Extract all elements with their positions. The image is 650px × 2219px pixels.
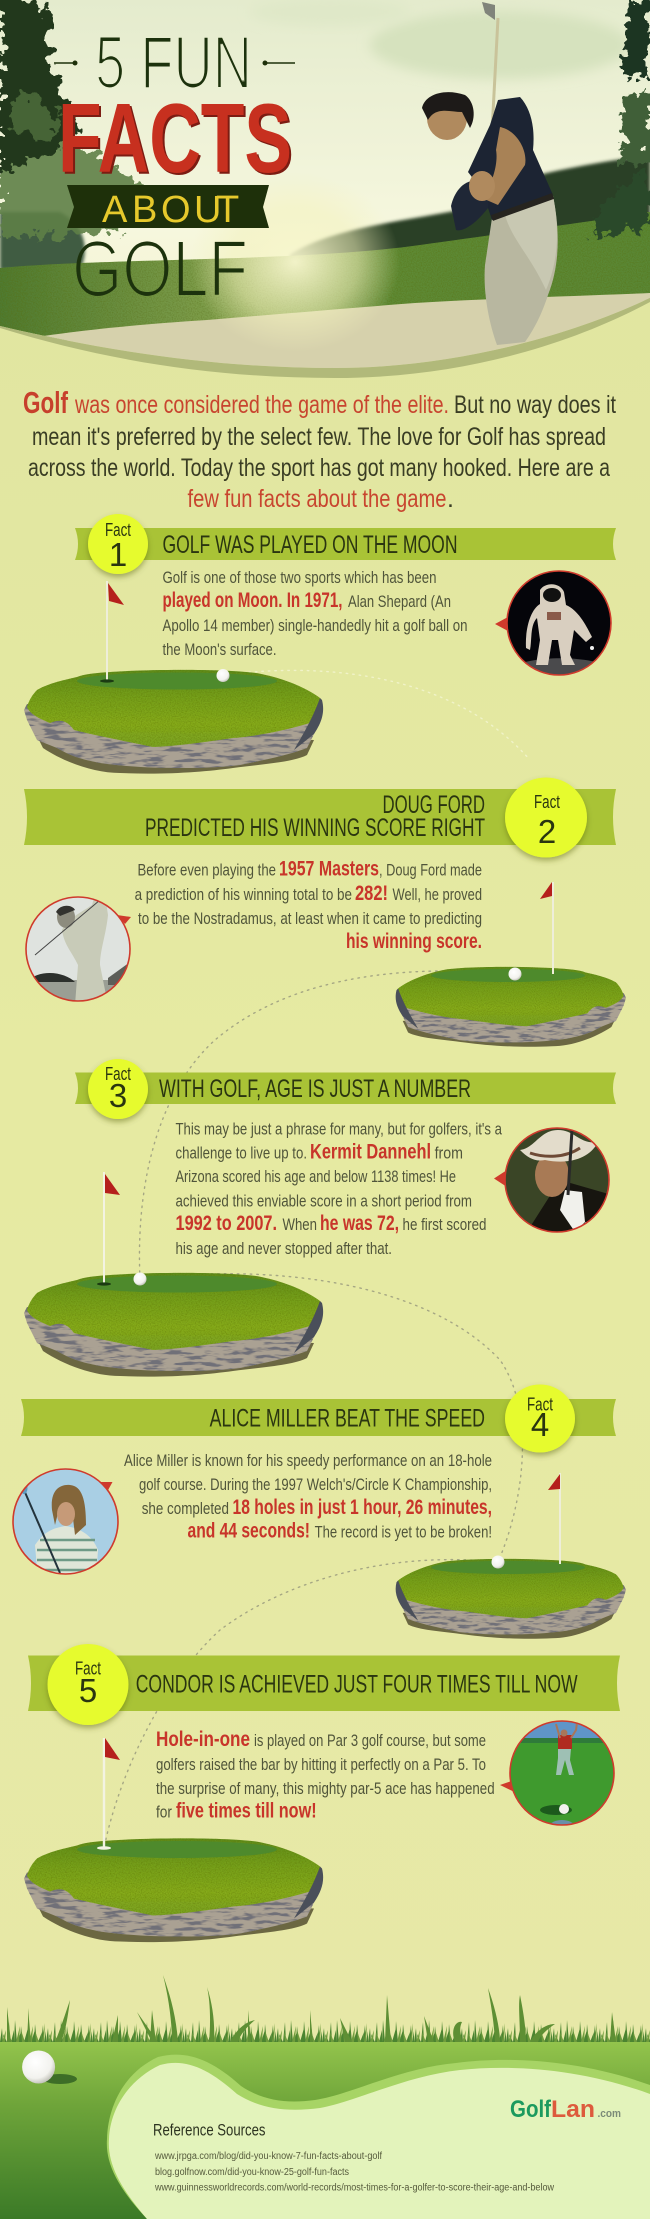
fact 3 body text: Arizona scored his age and below 1138 times! He	[176, 1168, 456, 1186]
fact 3 island	[24, 1273, 323, 1377]
fact 4 badge: Fact	[527, 1394, 553, 1414]
title	[54, 21, 295, 313]
fact 4 body text: 18 holes in just 1 hour, 26 minutes,	[232, 1496, 492, 1519]
footer sources panel	[107, 2055, 650, 2219]
fact 2 badge	[505, 778, 587, 858]
fact 1 panel	[24, 514, 620, 774]
fact 1 body text	[162, 569, 468, 659]
fact 5 flag	[97, 1738, 120, 1850]
reference sources heading: Reference Sources	[153, 2121, 266, 2140]
fact 2 badge: Fact	[534, 792, 560, 812]
fact 4 body text: The record is yet to be broken!	[315, 1524, 492, 1542]
fact 2 body text: his winning score.	[346, 930, 482, 953]
fact 1 astronaut photo	[495, 570, 612, 676]
fact 3 badge: Fact	[105, 1064, 131, 1084]
fact 4 Alice Miller photo	[12, 1468, 119, 1575]
fact 2 island	[396, 967, 626, 1047]
hero curved band	[0, 298, 650, 378]
fact 3 ribbon	[75, 1072, 616, 1104]
reference links: www.jrpga.com/blog/did-you-know-7-fun-facts-about-golf	[154, 2151, 382, 2162]
fact 2 heading: DOUG FORD	[382, 791, 485, 819]
fact 2 heading: PREDICTED HIS WINNING SCORE RIGHT	[145, 814, 485, 842]
fact 4 badge: 4	[531, 1406, 549, 1443]
title line: FACTS: FACTS	[60, 85, 294, 195]
reference links: www.guinnessworldrecords.com/world-records/most-times-for-a-golfer-to-score-their-age-and-below	[154, 2183, 555, 2194]
fact 5 body text: golfers raised the bar by hitting it perfectly on a Par 5. To	[156, 1756, 486, 1774]
intro paragraph	[23, 385, 616, 513]
fact 2 body text: to be the Nostradamus, at least when it came to predicting	[138, 910, 482, 928]
fact 5 island	[24, 1838, 323, 1942]
title line: 5 FUN: 5 FUN	[95, 21, 252, 104]
fact 5 body text: five times till now!	[176, 1800, 317, 1822]
title line: GOLF: GOLF	[72, 224, 248, 313]
footer golf ball	[22, 2050, 77, 2084]
fact 4 island	[396, 1559, 626, 1639]
fact 1 island	[24, 670, 323, 774]
fact 1 ball	[216, 669, 230, 682]
fact 5 body text: Hole-in-one	[156, 1728, 250, 1751]
hero photo: golfer in bunker	[0, 0, 650, 380]
fact 3 body text	[176, 1120, 503, 1258]
fact 1 badge	[88, 514, 148, 574]
fact 1 body text: Apollo 14 member) single-handedly hit a golf ball on	[162, 617, 468, 635]
fact 5 body text: is played on Par 3 golf course, but some	[254, 1732, 486, 1750]
footer grass	[0, 1975, 650, 2042]
title ribbon: ABOUT	[67, 185, 269, 231]
fact 2 flag	[540, 882, 553, 974]
fact 4 heading: ALICE MILLER BEAT THE SPEED	[210, 1404, 485, 1432]
title ribbon: ABOUT: ABOUT	[102, 189, 239, 231]
fact 2 panel	[20, 778, 626, 1047]
fact 4 body text	[124, 1452, 492, 1542]
fact 5 panel	[24, 1644, 620, 1942]
logo: GolfLan.com	[510, 2096, 621, 2123]
logo: GolfLan.com: Golf	[510, 2096, 552, 2123]
fact 3 body text: When	[282, 1216, 317, 1234]
fact 3 body text: his age and never stopped after that.	[176, 1240, 392, 1258]
fact 5 badge	[48, 1644, 128, 1725]
fact 3 body text: from	[435, 1145, 463, 1163]
fact 5 badge: 5	[79, 1672, 97, 1709]
fact 2 body text	[135, 858, 482, 953]
intro paragraph: .	[447, 485, 454, 513]
fact 2 badge: 2	[538, 813, 556, 850]
fact 4 body text: Alice Miller is known for his speedy performance on an 18-hole	[124, 1452, 492, 1470]
fact 5 body text: the surprise of many, this mighty par-5 ace has happened	[156, 1780, 495, 1798]
fact 2 body text: 282!	[355, 882, 388, 905]
fact 4 flag	[548, 1473, 560, 1564]
fact 5 body text	[156, 1728, 495, 1822]
fact 2 body text: Well, he proved	[392, 886, 482, 904]
reference links: blog.golfnow.com/did-you-know-25-golf-fun-facts	[155, 2167, 349, 2178]
fact 3 body text: challenge to live up to.	[176, 1145, 307, 1163]
fact 4 ball	[492, 1556, 504, 1568]
title line: FACTS: FACTS	[58, 83, 292, 193]
fact 3 body text: 1992 to 2007.	[176, 1212, 277, 1235]
fact 4 panel	[10, 1384, 626, 1639]
fact 2 ribbon	[24, 789, 616, 845]
footer ground	[0, 2042, 650, 2219]
fact 2 body text: , Doug Ford made	[379, 862, 482, 880]
fact 3 body text: achieved this enviable score in a short period from	[176, 1192, 472, 1210]
fact 4 body text: and 44 seconds!	[188, 1520, 310, 1542]
fact 3 heading: WITH GOLF, AGE IS JUST A NUMBER	[159, 1075, 471, 1103]
fact 4 body text: golf course. During the 1997 Welch's/Circle K Championship,	[139, 1476, 492, 1494]
fact 3 badge	[88, 1059, 148, 1119]
fact 3 ball	[134, 1272, 146, 1286]
dotted ball trajectories	[104, 670, 530, 1848]
logo: GolfLan.com: .com	[598, 2108, 621, 2120]
fact 5 ribbon	[28, 1656, 620, 1711]
fact 1 body text: played on Moon. In 1971,	[162, 589, 342, 612]
reference links	[154, 2151, 555, 2194]
fact 1 ribbon	[75, 528, 616, 560]
fact 3 Kermit Dannehl photo	[494, 1127, 610, 1233]
fact 2 body text: Before even playing the	[138, 862, 276, 880]
fact 2 body text: a prediction of his winning total to be	[135, 886, 352, 904]
fact 1 body text: the Moon's surface.	[162, 641, 276, 659]
fact 3 body text: This may be just a phrase for many, but for golfers, it's a	[176, 1120, 503, 1138]
fact 1 flag	[100, 581, 124, 683]
fact 2 ball	[508, 968, 522, 980]
fact 4 ribbon	[21, 1399, 616, 1436]
fact 2 heading	[145, 791, 485, 842]
fact 3 badge: 3	[109, 1077, 127, 1114]
fact 4 badge	[505, 1384, 575, 1452]
fact 1 body text: Alan Shepard (An	[348, 593, 451, 611]
fact 3 body text: Kermit Dannehl	[310, 1141, 431, 1164]
fact 1 heading: GOLF WAS PLAYED ON THE MOON	[162, 531, 458, 559]
fact 3 body text: he was 72,	[320, 1212, 399, 1235]
fact 5 celebrating golfer photo	[500, 1720, 615, 1826]
fact 2 Doug Ford photo	[25, 896, 131, 1002]
intro paragraph: few fun facts about the game	[188, 485, 446, 513]
fact 3 flag	[97, 1172, 120, 1286]
fact 3 panel	[24, 1059, 616, 1377]
fact 3 body text: he first scored	[402, 1216, 486, 1234]
logo: GolfLan.com: Lan	[551, 2096, 595, 2123]
fact 5 body text: for	[156, 1804, 172, 1822]
fact 4 body text: she completed	[142, 1500, 229, 1518]
intro paragraph: was once considered the game of the elite.	[74, 391, 449, 419]
intro paragraph: Golf	[23, 385, 68, 420]
fact 5 badge: Fact	[75, 1659, 101, 1679]
fact 1 badge: Fact	[105, 520, 131, 540]
fact 2 body text: 1957 Masters	[279, 858, 379, 880]
fact 1 body text: Golf is one of those two sports which has been	[162, 569, 436, 587]
fact 1 badge: 1	[109, 536, 127, 573]
